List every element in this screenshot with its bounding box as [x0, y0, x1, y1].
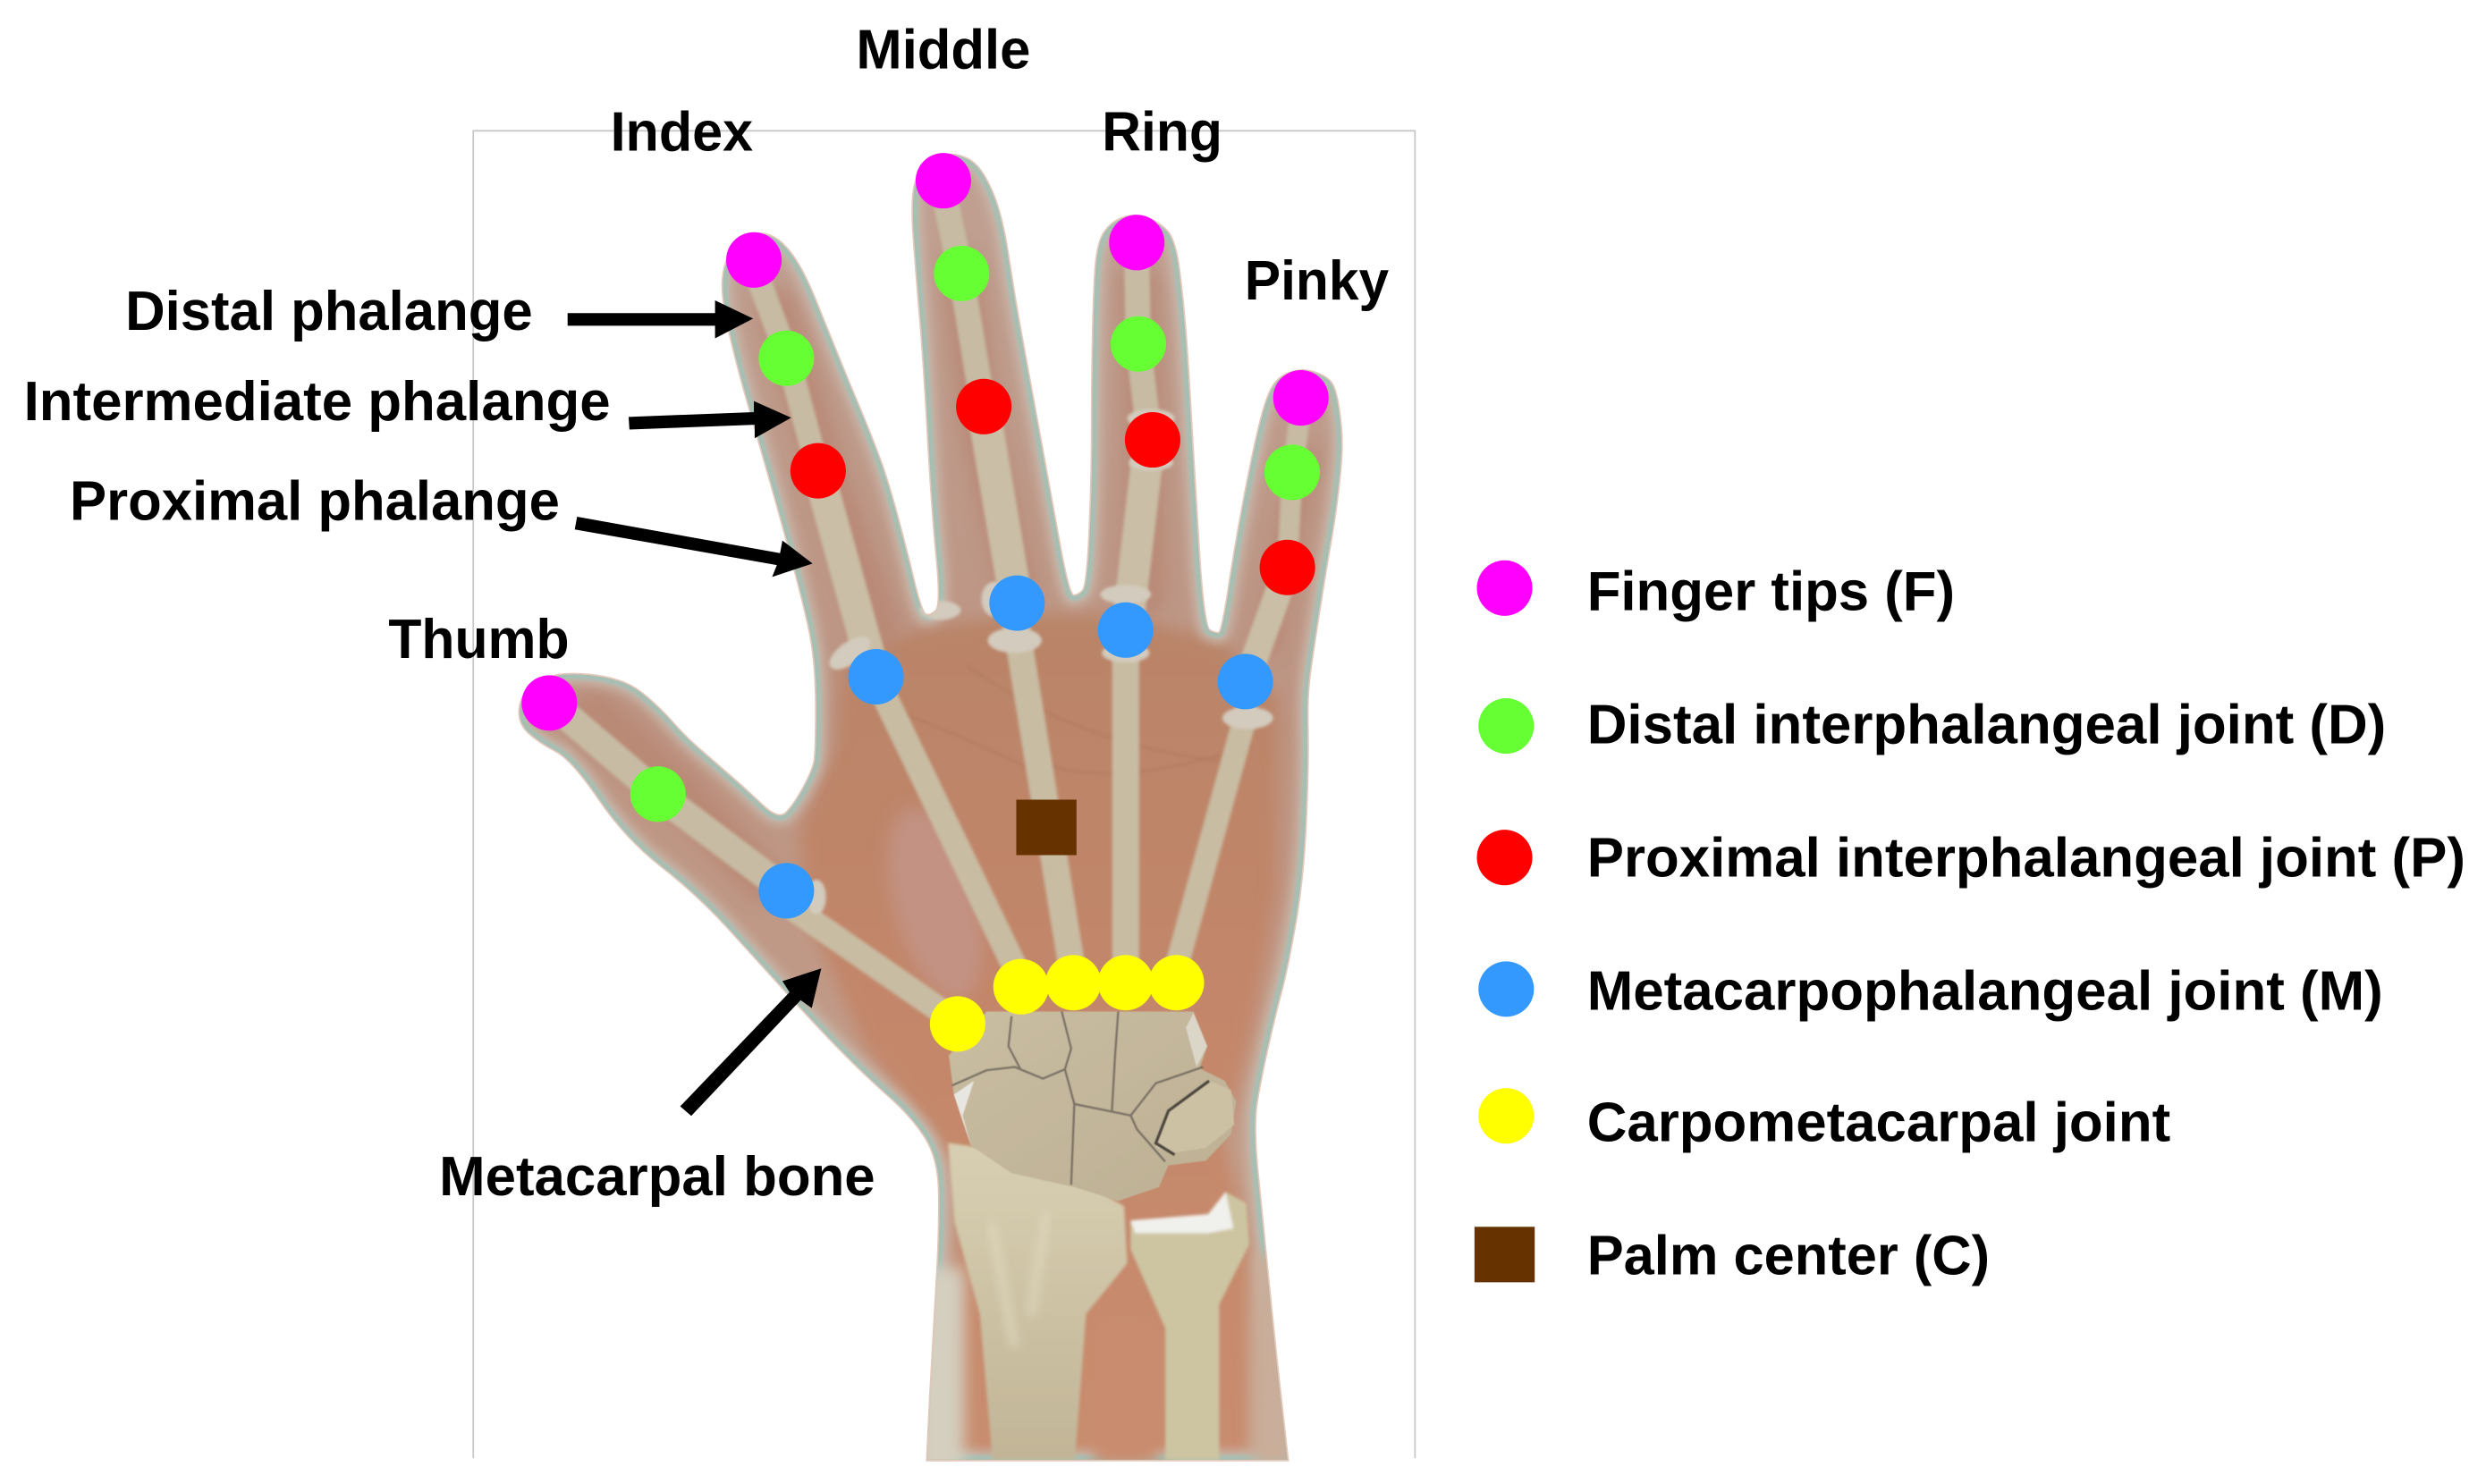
legend [1475, 561, 2465, 1286]
markers: distal interphalangeal joints [630, 246, 1320, 822]
arrow: intermediate phalange [629, 401, 791, 438]
thenar highlight [885, 806, 985, 998]
palm creases [904, 666, 1253, 777]
finger labels: Pinky [1245, 250, 1390, 312]
finger and metacarpal bones [558, 198, 1300, 1023]
bone labels: Metacarpal bone [439, 1146, 875, 1208]
palm flesh [800, 615, 1278, 1460]
legend: distal interphalangeal joint: Distal interphalangeal joint (D) [1587, 695, 2386, 756]
markers: carpometacarpal joints [930, 955, 1205, 1051]
legend: finger tips: Finger tips (F) [1587, 561, 1955, 623]
finger labels [388, 19, 1390, 670]
markers: proximal interphalangeal joints [791, 379, 1315, 595]
bone labels: Intermediate phalange [24, 371, 611, 433]
bone labels: Proximal phalange [70, 471, 560, 533]
hand edge band [520, 156, 1341, 1460]
legend: proximal interphalangeal joint: Proximal interphalangeal joint (P) [1587, 827, 2465, 889]
bone labels [24, 281, 875, 1208]
radius [948, 1143, 1128, 1460]
finger flesh [595, 269, 1306, 880]
finger labels: Middle [856, 19, 1030, 80]
carpal bones [949, 1012, 1236, 1201]
marker: palm center [1016, 799, 1077, 856]
arrow: metacarpal bone [681, 968, 821, 1116]
legend: metacarpophalangeal joint: Metacarpophalangeal joint (M) [1587, 960, 2383, 1022]
legend: palm center: Palm center (C) [1587, 1225, 1990, 1286]
arrow: distal phalange [568, 300, 753, 339]
markers: finger tips [521, 153, 1329, 730]
finger labels: Index [611, 101, 754, 163]
illustration: hand with bones [519, 154, 1343, 1462]
knuckle bone heads [807, 409, 1273, 915]
legend: carpometacarpal joint: Carpometacarpal joint [1587, 1092, 2170, 1154]
bone labels: Distal phalange [125, 281, 533, 342]
finger labels: Thumb [388, 609, 569, 670]
hand skin [520, 164, 1336, 1454]
radius mottling [991, 1212, 1046, 1347]
arrow: proximal phalange [575, 517, 813, 577]
hand outer edge [520, 156, 1341, 1460]
markers: metacarpophalangeal joints [758, 576, 1273, 918]
ulna [1130, 1192, 1249, 1460]
forearm side shading [917, 1252, 1294, 1474]
finger labels: Ring [1102, 101, 1222, 163]
image frame [473, 131, 1415, 1458]
